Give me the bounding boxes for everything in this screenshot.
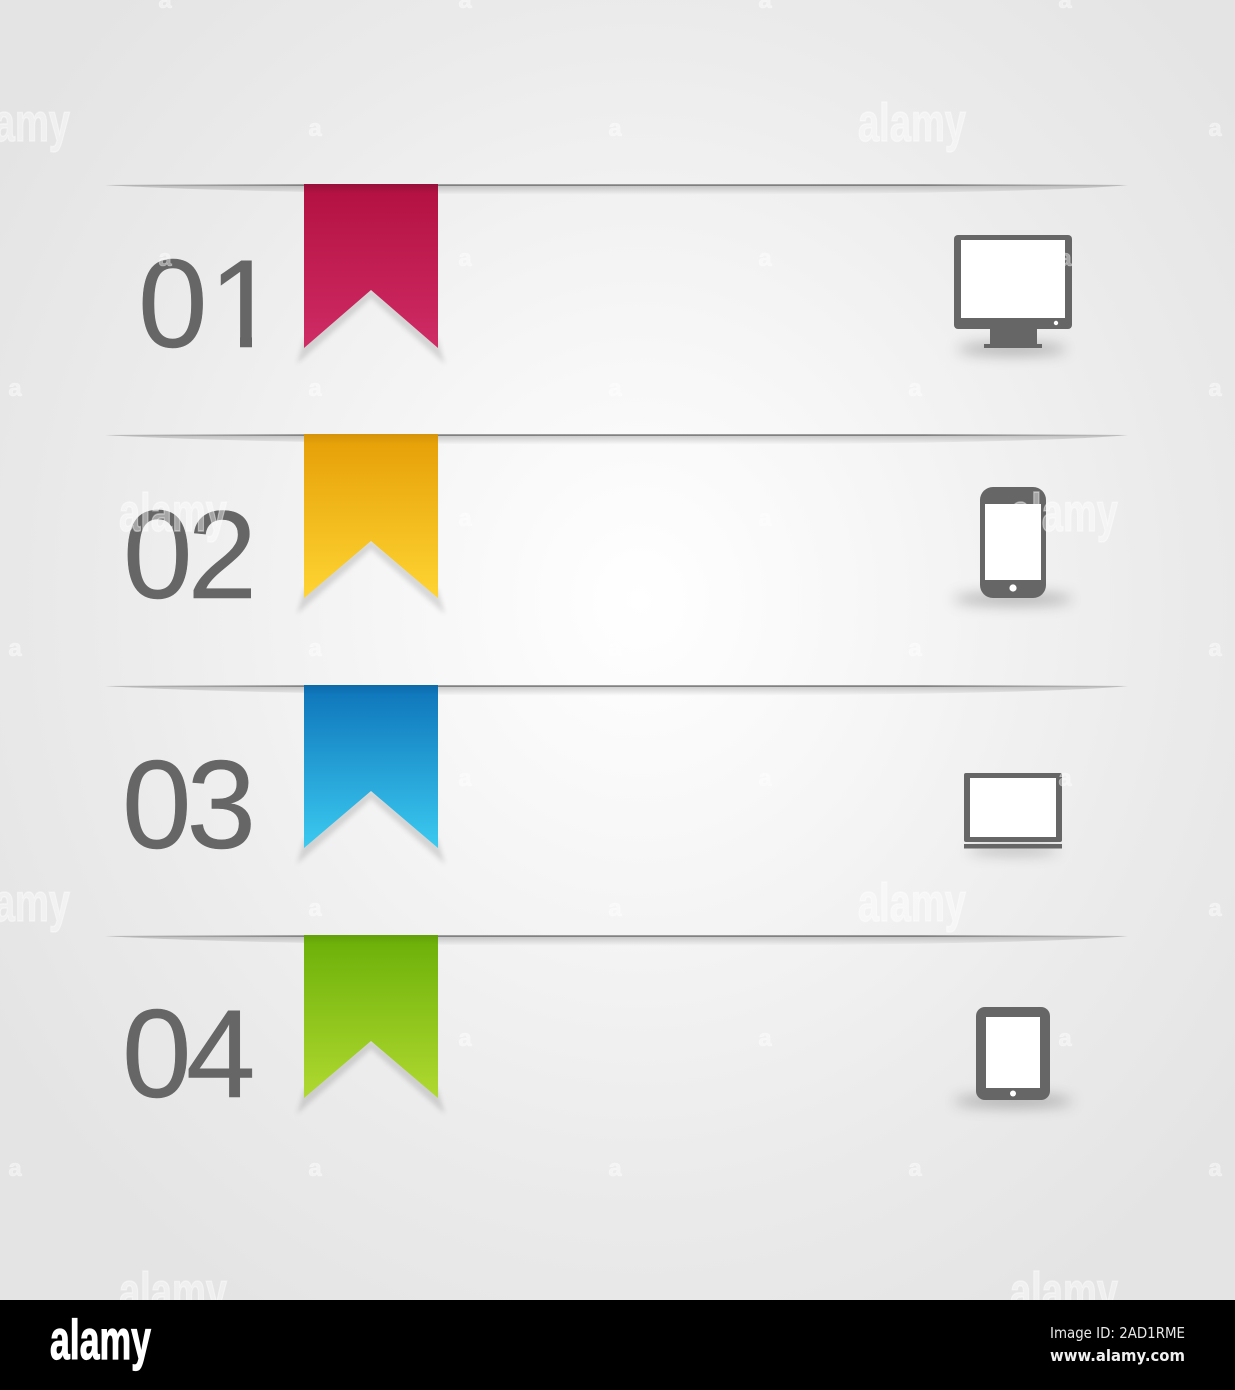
stock watermarks: a [458, 505, 472, 532]
stock watermarks: a [758, 765, 772, 792]
stock watermarks: a [308, 635, 322, 662]
panel: row 02 [105, 434, 1128, 625]
stock watermarks: a [158, 245, 172, 272]
icon: tablet [953, 1007, 1073, 1107]
stock watermarks: alamy [119, 1262, 227, 1322]
stock watermarks: a [1208, 895, 1222, 922]
image id: Image ID: 2AD1RME [1050, 1324, 1185, 1342]
stock watermarks: a [908, 635, 922, 662]
number 02: 02 [123, 486, 257, 625]
stock watermarks: a [308, 115, 322, 142]
stock watermarks: a [8, 635, 22, 662]
stock watermarks: a [1058, 245, 1072, 272]
ribbon: crimson [297, 184, 445, 364]
stock watermarks: alamy [858, 873, 966, 933]
stock watermarks: a [458, 245, 472, 272]
stock watermarks: a [1208, 1155, 1222, 1182]
ribbon: blue [297, 685, 445, 864]
stock watermarks: a [758, 505, 772, 532]
stock watermarks: a [1058, 765, 1072, 792]
stock watermarks: a [8, 1155, 22, 1182]
number 01: 01 [138, 235, 279, 374]
stock watermarks: a [8, 375, 22, 402]
stock watermarks: a [758, 1025, 772, 1052]
stock watermarks: alamy [1010, 1262, 1118, 1322]
ribbon: amber [297, 434, 445, 614]
footer logo: alamy [50, 1308, 151, 1371]
stock watermarks: alamy [119, 483, 227, 543]
stock watermarks: a [308, 375, 322, 402]
stock watermarks: a [758, 245, 772, 272]
stock watermarks: a [1208, 115, 1222, 142]
website: www.alamy.com [1050, 1346, 1185, 1365]
stock watermarks: a [908, 375, 922, 402]
stock watermarks: a [608, 375, 622, 402]
panel: row 03 [105, 685, 1128, 875]
stock watermarks: a [1208, 635, 1222, 662]
ribbon: green [297, 935, 445, 1114]
stock watermarks: a [1208, 375, 1222, 402]
icon: laptop [964, 773, 1062, 854]
stock watermarks: a [608, 635, 622, 662]
stock watermarks: alamy [1010, 483, 1118, 543]
stock watermarks: a [608, 1155, 622, 1182]
stock watermarks: a [308, 895, 322, 922]
panel: row 04 [105, 935, 1128, 1124]
number 03: 03 [122, 736, 256, 875]
number 04: 04 [122, 985, 256, 1124]
footer bar [0, 1300, 1235, 1390]
stock watermarks: a [608, 115, 622, 142]
icon: desktop monitor [954, 235, 1072, 355]
stock watermarks: a [908, 1155, 922, 1182]
stock watermarks: alamy [858, 93, 966, 153]
stock watermarks: a [458, 1025, 472, 1052]
icon: smartphone [953, 487, 1073, 605]
panel: row 01 [105, 184, 1128, 374]
stock watermarks: a [308, 1155, 322, 1182]
stock watermarks: a [608, 895, 622, 922]
stock watermarks: a [1058, 1025, 1072, 1052]
stock watermarks: a [458, 765, 472, 792]
